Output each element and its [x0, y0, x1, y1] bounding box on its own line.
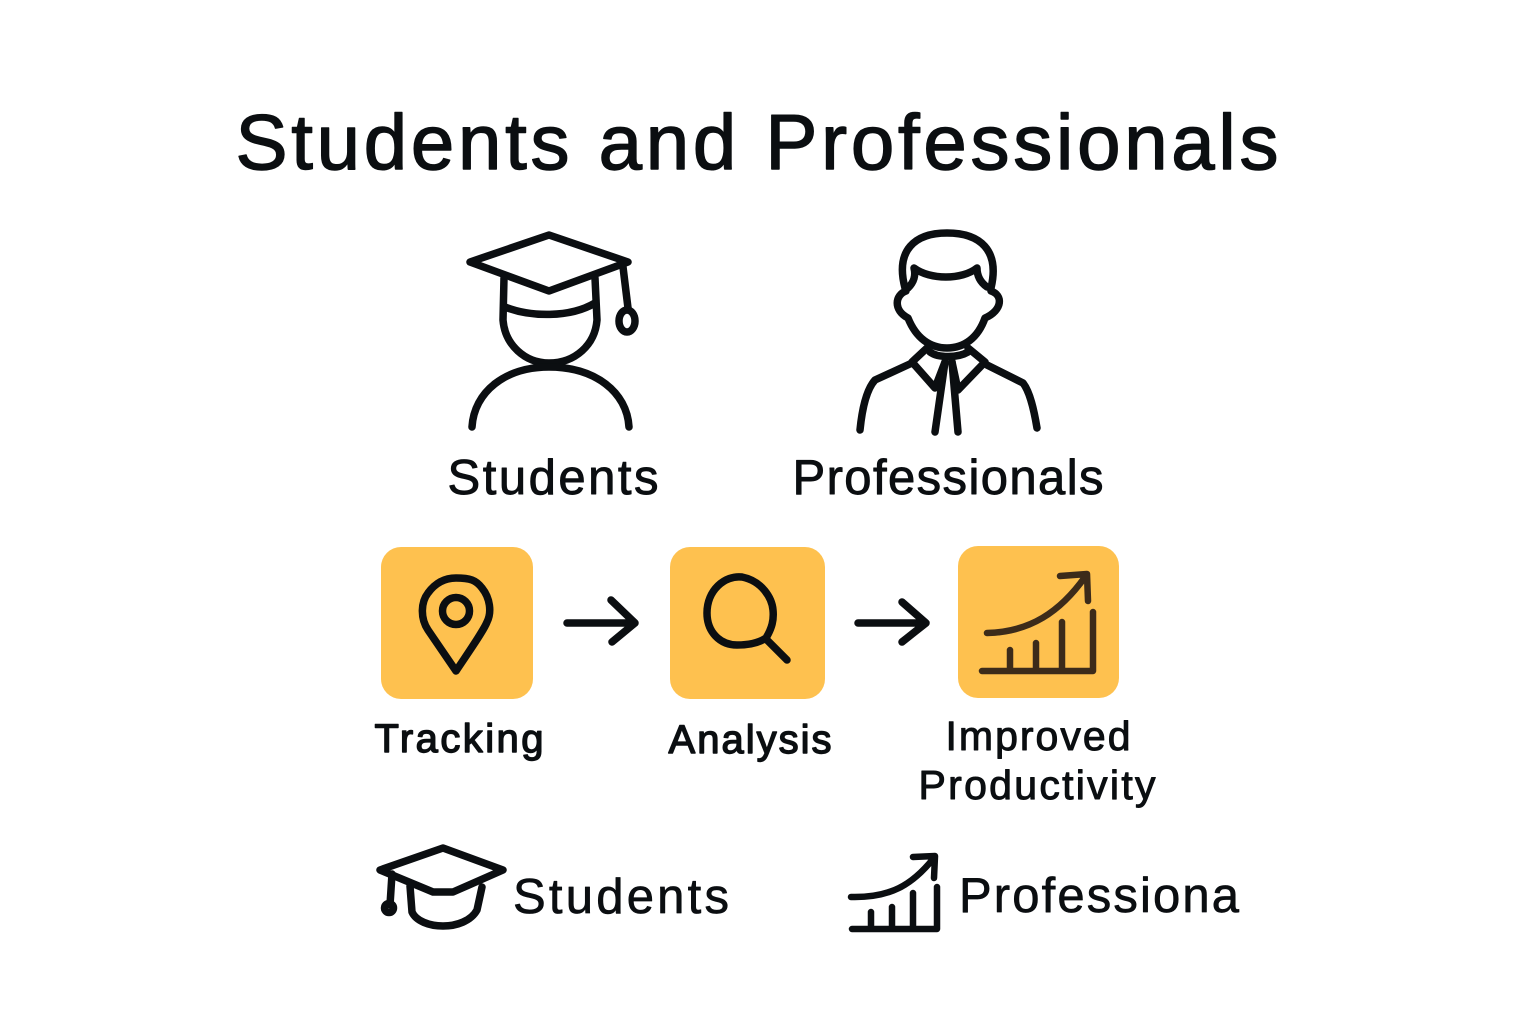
legend icon: graduation cap — [380, 848, 503, 926]
arrow: tracking to analysis — [567, 600, 635, 642]
tile: analysis icon — [670, 547, 825, 699]
legend label: Students: Students — [513, 870, 729, 924]
label: Professionals: Professionals — [792, 451, 1104, 505]
tile: tracking icon — [381, 547, 533, 699]
label: Tracking: Tracking — [374, 717, 544, 761]
tile: growth chart icon — [958, 546, 1119, 698]
label: Students: Students — [448, 451, 658, 505]
icon: professional with tie — [860, 233, 1037, 432]
title: Students and Professionals — [236, 98, 1278, 186]
arrow: analysis to improved productivity — [858, 602, 926, 642]
label: Improved Productivity — [918, 713, 1156, 808]
label: Improved Productivity: Productivity — [918, 762, 1156, 808]
legend label: Professiona: Professiona — [959, 869, 1240, 923]
icon: student with graduation cap — [470, 235, 635, 427]
label: Analysis: Analysis — [668, 718, 832, 762]
label: Improved Productivity: Improved — [946, 713, 1130, 759]
legend icon: growth chart — [851, 856, 937, 929]
